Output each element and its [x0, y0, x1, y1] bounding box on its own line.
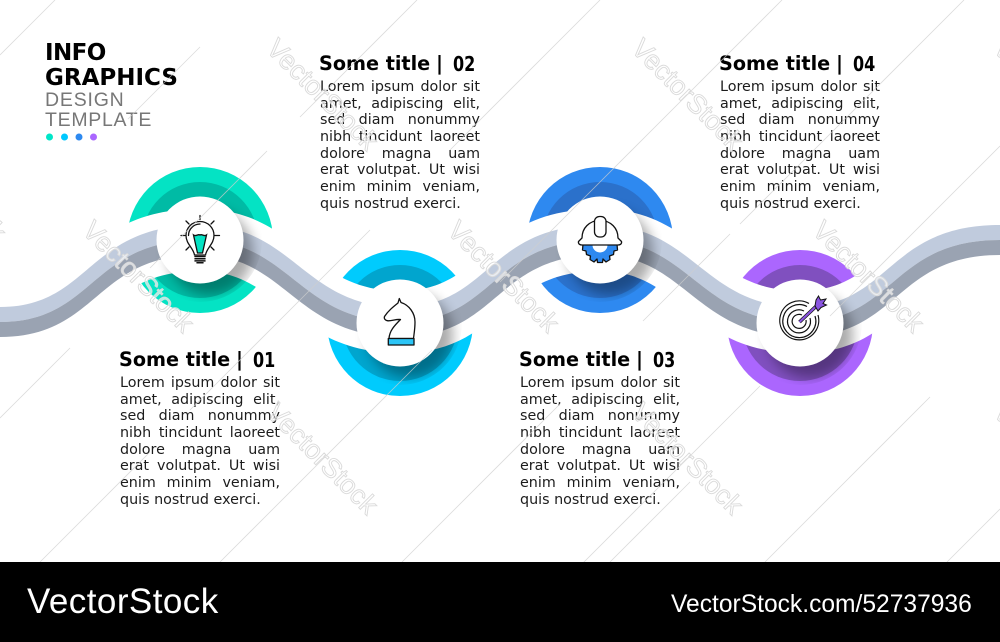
text block: step 3 [519, 348, 680, 508]
text block: step 2 [319, 52, 480, 212]
circle drop shadows [167, 209, 853, 378]
body 01: erat volutpat. Ut wisi [120, 458, 280, 474]
body 04: quis nostrud exerci. [720, 196, 861, 212]
body 01 [120, 375, 280, 508]
body 02: sed diam nonummy [320, 112, 480, 128]
body 04: enim minim veniam, [720, 179, 880, 195]
body 01: Lorem ipsum dolor sit [120, 375, 280, 391]
title 03 [519, 348, 675, 372]
watermark overlay: VectorStock [807, 215, 930, 338]
title 02: Some title [319, 52, 430, 75]
body 03: amet, adipiscing elit, [520, 392, 680, 408]
heading colour dots [46, 134, 97, 140]
text block: step 1 [119, 348, 280, 508]
body 04: Lorem ipsum dolor sit [720, 79, 880, 95]
text block: step 4 [719, 52, 880, 212]
body 04: amet, adipiscing elit, [720, 96, 880, 112]
title 01: 01 [253, 348, 275, 372]
body 04: erat volutpat. Ut wisi [720, 162, 880, 178]
icon: light bulb [181, 216, 220, 263]
title 03: 03 [653, 348, 675, 372]
body 03: erat volutpat. Ut wisi [520, 458, 680, 474]
body 01: quis nostrud exerci. [120, 492, 261, 508]
coloured ring: step 1 [127, 167, 273, 313]
watermark overlay: VectorStock [77, 215, 200, 338]
footer id: VectorStock.com/52737936 [671, 591, 972, 618]
heading [45, 40, 178, 131]
body 02: nibh tincidunt laoreet [320, 129, 480, 145]
footer logo: VectorStock [27, 582, 219, 621]
body 03: quis nostrud exerci. [520, 492, 661, 508]
title 01: | [236, 348, 243, 371]
wavy ribbon road [0, 209, 1000, 353]
watermark overlay: VectorStock [261, 33, 384, 156]
title 03: Some title [519, 348, 630, 371]
body 03: Lorem ipsum dolor sit [520, 375, 680, 391]
title 04: 04 [853, 52, 875, 76]
watermark overlay: VectorStock [261, 397, 384, 520]
body 04: dolore magna uam [720, 146, 880, 162]
body 01: amet, adipiscing elit, [120, 392, 280, 408]
body 03: enim minim veniam, [520, 475, 680, 491]
heading: DESIGN [45, 89, 125, 111]
icon: target with dart [780, 296, 826, 340]
body 03: sed diam nonummy [520, 408, 680, 424]
body 02 [320, 79, 480, 212]
heading: TEMPLATE [45, 109, 152, 131]
white icon discs [156, 196, 844, 366]
watermark overlay: VectorStock [626, 397, 749, 520]
body 03: nibh tincidunt laoreet [520, 425, 680, 441]
body 03: dolore magna uam [520, 442, 680, 458]
body 03 [520, 375, 680, 508]
heading: INFO [45, 40, 106, 66]
body 01: enim minim veniam, [120, 475, 280, 491]
title 01: Some title [119, 348, 230, 371]
body 02: enim minim veniam, [320, 179, 480, 195]
icon: chess knight [384, 298, 415, 345]
body 01: sed diam nonummy [120, 408, 280, 424]
title 01 [119, 348, 275, 372]
body 04: nibh tincidunt laoreet [720, 129, 880, 145]
coloured ring: step 2 [327, 250, 473, 396]
body 01: dolore magna uam [120, 442, 280, 458]
title 02 [319, 52, 475, 76]
watermark overlay: VectorStock [442, 215, 565, 338]
icon: helmet with gear [578, 216, 622, 262]
body 02: quis nostrud exerci. [320, 196, 461, 212]
title 03: | [636, 348, 643, 371]
heading: GRAPHICS [45, 65, 178, 91]
title 02: 02 [453, 52, 475, 76]
body 02: erat volutpat. Ut wisi [320, 162, 480, 178]
watermark overlay: VectorStock [626, 33, 749, 156]
coloured ring: step 3 [527, 167, 673, 313]
title 04: | [836, 52, 843, 75]
coloured ring: step 4 [727, 250, 873, 396]
body 02: amet, adipiscing elit, [320, 96, 480, 112]
title 04: Some title [719, 52, 830, 75]
title 04 [719, 52, 875, 76]
footer bar [0, 562, 1000, 642]
body 02: Lorem ipsum dolor sit [320, 79, 480, 95]
title 02: | [436, 52, 443, 75]
body 02: dolore magna uam [320, 146, 480, 162]
body 01: nibh tincidunt laoreet [120, 425, 280, 441]
body 04: sed diam nonummy [720, 112, 880, 128]
body 04 [720, 79, 880, 212]
